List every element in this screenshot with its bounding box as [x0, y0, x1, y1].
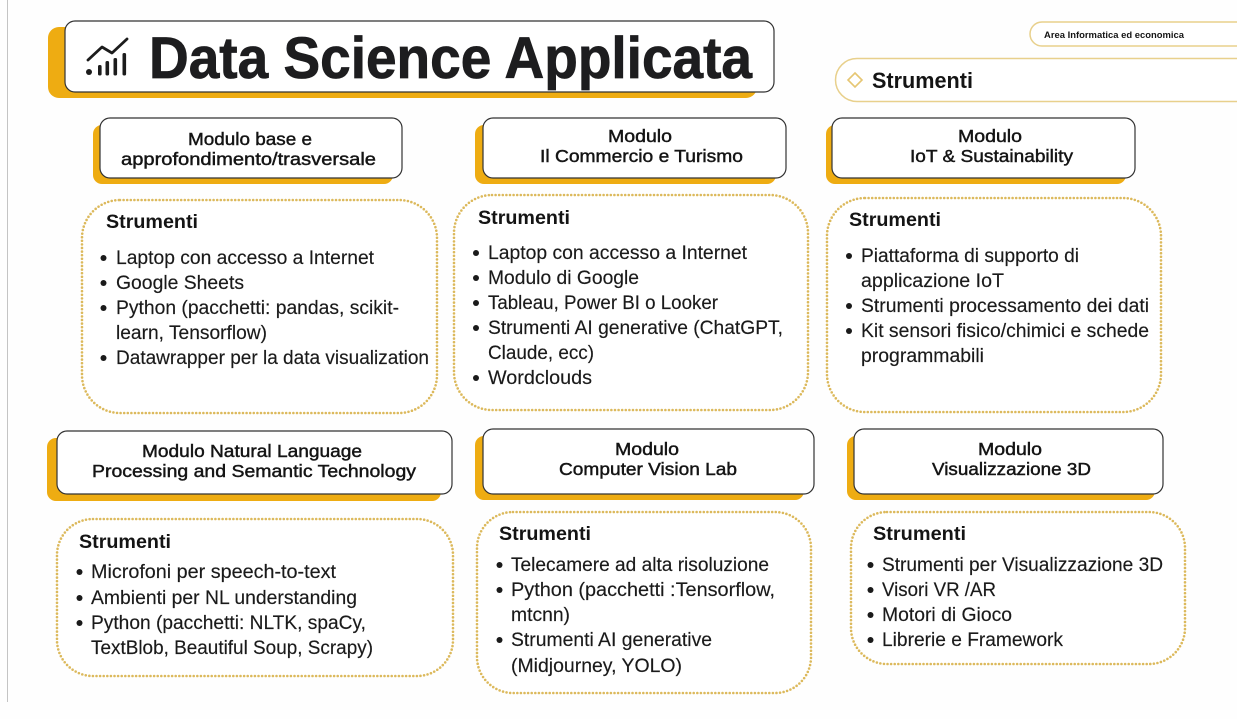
- module header: IoT and Sustainability: IoT & Sustainability: [910, 146, 1073, 166]
- panel: strumenti modulo base: learn, Tensorflow): [116, 323, 267, 344]
- panel: strumenti Visualizzazione 3D: Librerie e Framework: [882, 630, 1064, 651]
- module header: Visualizzazione 3D: Modulo: [978, 439, 1042, 459]
- panel: strumenti IoT: Kit sensori fisico/chimici e schede: [861, 321, 1149, 342]
- module header: Computer Vision Lab: Computer Vision Lab: [559, 459, 737, 479]
- panel: strumenti Commercio e Turismo: Strumenti: [478, 208, 570, 229]
- panel: strumenti Commercio e Turismo: Wordclouds: [488, 368, 592, 389]
- panel: strumenti modulo base: Google Sheets: [116, 273, 244, 294]
- panel: strumenti Commercio e Turismo: Laptop con accesso a Internet: [488, 243, 748, 264]
- panel: strumenti Visualizzazione 3D: Strumenti per Visualizzazione 3D: [882, 555, 1163, 576]
- panel: strumenti Computer Vision: mtcnn): [511, 605, 570, 626]
- panel: strumenti modulo base: Laptop con accesso a Internet: [116, 248, 375, 269]
- module header: base e approfondimento: [93, 118, 402, 184]
- panel: strumenti Computer Vision: [477, 512, 811, 693]
- module header: Natural Language Processing: Modulo Natural Language: [142, 441, 362, 461]
- module header: Natural Language Processing: Processing and Semantic Technology: [92, 461, 416, 481]
- module header: Visualizzazione 3D: [847, 429, 1163, 500]
- module header: base e approfondimento: Modulo base e: [188, 129, 312, 149]
- title text: Data Science Applicata: [149, 26, 753, 91]
- module header: Visualizzazione 3D: Visualizzazione 3D: [932, 459, 1091, 479]
- panel: strumenti NLP: Ambienti per NL understanding: [91, 588, 357, 609]
- module header: IoT and Sustainability: [826, 118, 1135, 184]
- panel: strumenti Visualizzazione 3D: Visori VR /AR: [882, 580, 996, 601]
- module header: Commercio e Turismo: [475, 118, 786, 184]
- panel: strumenti IoT: Strumenti processamento dei dati: [861, 296, 1149, 317]
- panel: strumenti Commercio e Turismo: Modulo di Google: [488, 268, 639, 289]
- tag: area: [1030, 22, 1237, 46]
- icon: diamond: [848, 73, 862, 87]
- panel: strumenti Visualizzazione 3D: Motori di Gioco: [882, 605, 1012, 626]
- panel: strumenti Commercio e Turismo: Tableau, Power BI o Looker: [488, 293, 719, 314]
- module header: Commercio e Turismo: Il Commercio e Turismo: [540, 146, 743, 166]
- panel: strumenti IoT: applicazione IoT: [861, 271, 1004, 292]
- module header: IoT and Sustainability: Modulo: [958, 126, 1022, 146]
- module header: Computer Vision Lab: Modulo: [615, 439, 679, 459]
- panel: strumenti Visualizzazione 3D: Strumenti: [873, 524, 966, 545]
- panel: strumenti Commercio e Turismo: [454, 195, 808, 410]
- module header: Natural Language Processing: [47, 431, 452, 501]
- panel: strumenti Computer Vision: Strumenti: [499, 524, 591, 545]
- panel: strumenti IoT: programmabili: [861, 346, 984, 367]
- panel: strumenti IoT: Strumenti: [849, 210, 941, 231]
- panel: strumenti modulo base: Python (pacchetti: pandas, scikit-: [116, 298, 399, 319]
- panel: strumenti NLP: Microfoni per speech-to-text: [91, 562, 337, 583]
- panel: strumenti modulo base: [82, 200, 437, 413]
- module header: Commercio e Turismo: Modulo: [608, 126, 672, 146]
- title banner: [48, 21, 774, 98]
- panel: strumenti Commercio e Turismo: Strumenti AI generative (ChatGPT,: [488, 318, 783, 339]
- panel: strumenti Commercio e Turismo: Claude, ecc): [488, 343, 594, 364]
- panel: strumenti Visualizzazione 3D: [851, 512, 1185, 664]
- panel: strumenti modulo base: Datawrapper per la data visualization: [116, 348, 429, 369]
- section pill: Strumenti: Strumenti: [872, 68, 973, 93]
- icon: rising chart: [86, 39, 127, 76]
- panel: strumenti Computer Vision: Python (pacchetti :Tensorflow,: [511, 580, 775, 601]
- panel: strumenti Computer Vision: Strumenti AI generative: [511, 630, 712, 651]
- section pill: Strumenti: [836, 58, 1237, 102]
- panel: strumenti Computer Vision: (Midjourney, YOLO): [511, 656, 682, 677]
- tag: area: Area Informatica ed economica: [1044, 30, 1185, 41]
- panel: strumenti IoT: Piattaforma di supporto di: [861, 246, 1079, 267]
- panel: strumenti NLP: Strumenti: [79, 532, 171, 553]
- panel: strumenti modulo base: Strumenti: [106, 212, 198, 233]
- panel: strumenti NLP: [57, 519, 453, 676]
- panel: strumenti NLP: Python (pacchetti: NLTK, spaCy,: [91, 613, 366, 634]
- module header: Computer Vision Lab: [475, 429, 814, 500]
- module header: base e approfondimento: approfondimento/trasversale: [121, 149, 376, 169]
- panel: strumenti NLP: TextBlob, Beautiful Soup, Scrapy): [91, 638, 373, 659]
- panel: strumenti IoT: [827, 198, 1161, 412]
- panel: strumenti Computer Vision: Telecamere ad alta risoluzione: [511, 555, 769, 576]
